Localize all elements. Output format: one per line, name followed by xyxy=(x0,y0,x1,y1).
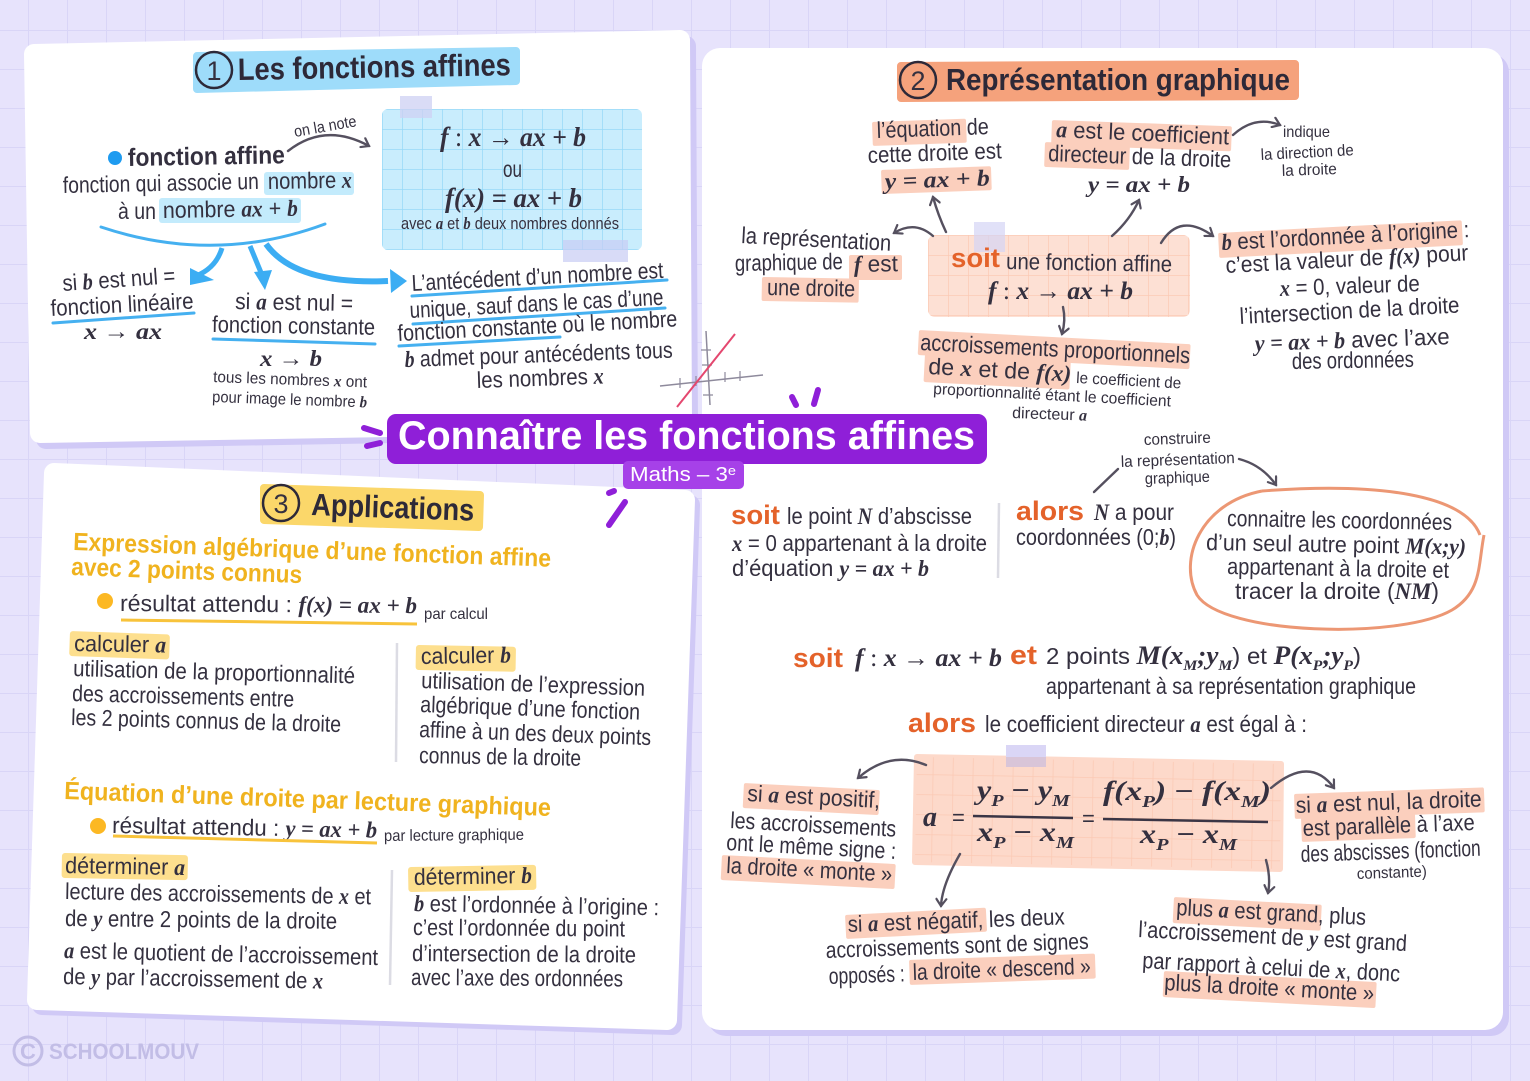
arrow and note: indique la direction: indique xyxy=(1283,124,1330,141)
text: fonction linéaire: x → ax xyxy=(83,319,162,344)
text: soit le point N xyxy=(731,500,987,581)
notation box: f(x) = ax + b xyxy=(445,183,582,213)
box: formule du coefficient directeur: P xyxy=(1141,792,1156,811)
panel: applications xyxy=(37,473,690,1025)
text: soit f et 2 points M et P: M xyxy=(1217,658,1233,674)
text: ordonnée à l'origine: y = ax + b avec l’axe xyxy=(1251,323,1450,356)
text: si a est négatif: la droite « descend » xyxy=(912,953,1091,985)
notation box: ou xyxy=(503,156,522,182)
main title: Connaître les fonctions affines xyxy=(398,414,975,458)
note: construire la représentation graphique: la représentation xyxy=(1121,450,1235,471)
callout: connaître les coordonnées: connaitre les coordonnées xyxy=(1227,505,1452,535)
text: antécédent: unique, sauf dans le cas d’une xyxy=(409,284,664,323)
block: déterminer b: avec l’axe des ordonnées xyxy=(411,964,623,991)
box: formule du coefficient directeur: M xyxy=(1055,833,1075,852)
box: formule du coefficient directeur: x xyxy=(977,817,990,847)
box: soit une fonction affine: f : x → ax + b xyxy=(988,278,1133,305)
watermark: schoolmouv xyxy=(14,1037,199,1065)
text: soit le point N: x = 0 appartenant à la droite xyxy=(731,530,987,556)
text: accroissements proportionnels xyxy=(918,329,1191,425)
result: par lecture graphique: résultat attendu : y = ax + b xyxy=(112,812,377,843)
text: si a est positif xyxy=(721,780,897,889)
block: calculer b: utilisation de l’expression xyxy=(421,667,646,701)
result: par calcul: résultat attendu : f(x) = ax + b xyxy=(120,590,417,618)
heading: applications xyxy=(263,485,480,528)
text: équation de la droite: y = ax + b xyxy=(881,165,990,194)
block: déterminer b: d’intersection de la droite xyxy=(412,940,636,968)
text: antécédent: b admet pour antécédents tous xyxy=(404,337,673,372)
text: alors le coefficient directeur: le coefficient directeur a est égal à : xyxy=(985,711,1307,737)
block: calculer a: utilisation de la proportionnalité xyxy=(73,655,355,688)
text: soit le point N: le point N d’abscisse xyxy=(787,503,972,529)
note: construire la représentation graphique: construire xyxy=(1144,430,1211,449)
callout: connaître les coordonnées xyxy=(1190,488,1484,629)
text: soit f et 2 points M et P: soit xyxy=(793,643,843,673)
block: déterminer a xyxy=(62,852,379,994)
subtitle: Maths 3e: Maths – 3 xyxy=(630,464,718,486)
text: accroissements proportionnels: directeur a xyxy=(1012,405,1087,425)
note: construire la représentation graphique xyxy=(1094,430,1276,492)
arrows from formula box xyxy=(858,760,1334,906)
block: calculer b: connus de la droite xyxy=(419,742,581,771)
text: si a est positif: si a est positif, xyxy=(747,780,881,813)
box: formule du coefficient directeur: − f(x xyxy=(1173,776,1233,806)
box: formule du coefficient directeur: P xyxy=(990,791,1004,810)
text: soit f et 2 points M et P: P xyxy=(1313,658,1323,674)
text: si a est nul xyxy=(1294,786,1485,883)
text: ordonnée à l'origine: b est l’ordonnée à l’origine : xyxy=(1221,216,1470,255)
box: formule du coefficient directeur: = xyxy=(952,805,965,830)
text: soit f et 2 points M et P: ) xyxy=(1232,643,1240,669)
decorative dashes around title xyxy=(364,390,818,525)
arrow and note: indique la direction xyxy=(1233,122,1354,180)
text: antécédent: L’antécédent d’un nombre est xyxy=(411,257,664,296)
box: formule du coefficient directeur: M xyxy=(1051,791,1071,810)
box: formule du coefficient directeur: − xyxy=(1004,775,1038,805)
text: accroissements proportionnels: proportionnalité étant le coefficient xyxy=(933,381,1172,410)
callout: connaître les coordonnées: tracer la droite (NM) xyxy=(1235,578,1439,604)
text: coefficient directeur: a est le coefficient xyxy=(1056,116,1230,150)
arrow: on la note xyxy=(288,113,369,151)
arrow and note: indique la direction: la droite xyxy=(1282,161,1337,180)
text: plus a est grand xyxy=(1138,894,1408,1008)
text: la représentation graphique: f est xyxy=(854,250,899,277)
text: fonction constante: pour image le nombre b xyxy=(212,389,367,411)
definition: fonction affine: fonction affine xyxy=(128,141,285,172)
box: formule du coefficient directeur: − xyxy=(1168,819,1203,849)
block: déterminer a: a est le quotient de l’accroissement xyxy=(64,937,379,970)
text: plus a est grand: par rapport à celui de x, donc xyxy=(1142,947,1401,986)
box: formule du coefficient directeur: a xyxy=(923,802,937,833)
text: antécédent xyxy=(397,257,678,393)
text: soit f et 2 points M et P: ;y xyxy=(1322,641,1344,670)
block: déterminer a: déterminer a xyxy=(65,852,185,880)
definition: fonction affine: fonction qui associe un xyxy=(63,168,259,198)
text: soit f et 2 points M et P: ) xyxy=(1353,643,1361,669)
blue branching arrows xyxy=(101,224,407,293)
text: la représentation graphique: la représentation xyxy=(741,222,892,256)
text: fonction constante xyxy=(212,288,375,411)
text: si a est négatif: opposés : xyxy=(828,960,905,989)
box: formule du coefficient directeur: = xyxy=(1082,806,1095,831)
box: soit une fonction affine: soit xyxy=(951,243,1000,273)
result: par calcul xyxy=(97,590,488,624)
text: si a est négatif: accroissements sont de signes xyxy=(825,928,1089,963)
text: équation de la droite xyxy=(867,113,1003,194)
subtitle: Maths 3e xyxy=(623,461,744,489)
block: déterminer a: de y par l’accroissement de x xyxy=(63,963,323,994)
block: déterminer a: de y entre 2 points de la droite xyxy=(65,905,337,934)
heading: les fonctions affines: 1 xyxy=(206,56,222,86)
text: la représentation graphique: graphique de xyxy=(735,248,843,276)
block: calculer b xyxy=(416,641,652,771)
text: alors N a pour coordonnées: coordonnées (0;b) xyxy=(1016,524,1176,550)
text: soit f et 2 points M et P: M xyxy=(1182,658,1198,674)
box: formule du coefficient directeur: x xyxy=(1140,819,1153,849)
text: si a est positif: les accroissements xyxy=(730,807,897,842)
block: déterminer a: lecture des accroissements de x et xyxy=(65,878,372,909)
text: ordonnée à l'origine xyxy=(1218,216,1470,374)
text: fonction linéaire: fonction linéaire xyxy=(50,288,194,321)
text: fonction linéaire xyxy=(50,262,194,344)
text: soit le point N: soit xyxy=(731,500,780,530)
block: déterminer b: c’est l’ordonnée du point xyxy=(413,914,626,941)
text: soit f et 2 points M et P: appartenant à sa représentation graphique xyxy=(1046,673,1416,699)
box: formule du coefficient directeur: P xyxy=(992,833,1006,852)
block: calculer b: affine à un des deux points xyxy=(419,716,652,750)
block: calculer b: algébrique d’une fonction xyxy=(420,691,641,725)
subtitle: Maths 3e: e xyxy=(728,463,736,478)
notation box xyxy=(382,96,642,262)
text: soit f et 2 points M et P: f : x → ax + b xyxy=(855,645,1002,672)
heading: équation d'une droite: Équation d’une droite par lecture graphique xyxy=(64,776,552,822)
result: par lecture graphique: par lecture graphique xyxy=(384,827,524,845)
text: si a est négatif: si a est négatif, les deux xyxy=(847,903,1065,937)
text: si a est nul: constante) xyxy=(1357,864,1427,883)
result: par calcul: par calcul xyxy=(424,606,488,623)
watermark: schoolmouv: C xyxy=(20,1039,36,1064)
text: alors N a pour coordonnées xyxy=(1016,496,1176,550)
text: coefficient directeur: directeur de la droite xyxy=(1048,140,1232,172)
text: ordonnée à l'origine: x = 0, valeur de xyxy=(1278,270,1420,301)
text: antécédent: fonction constante où le nombre xyxy=(397,305,678,346)
text: la représentation graphique: une droite xyxy=(767,274,855,302)
text: alors N a pour coordonnées: alors xyxy=(1016,496,1084,526)
heading: représentation graphique: Représentation graphique xyxy=(946,62,1290,97)
text: fonction constante: si a est nul = xyxy=(235,288,353,316)
text: si a est nul: si a est nul, la droite xyxy=(1295,786,1482,818)
text: fonction linéaire: si b est nul = xyxy=(62,262,176,296)
text: soit f et 2 points M et P: 2 points M(x xyxy=(1046,641,1181,670)
definition: fonction affine: nombre ax + b xyxy=(163,195,298,223)
box: formule du coefficient directeur: − xyxy=(1005,817,1040,847)
text: accroissements proportionnels: le coefficient de xyxy=(1076,370,1182,392)
text: équation de la droite: l’équation de xyxy=(876,113,989,143)
block: calculer a: des accroissements entre xyxy=(72,680,294,712)
box: formule du coefficient directeur: ) xyxy=(1151,776,1166,806)
definition: fonction affine: nombre x xyxy=(268,167,352,194)
heading: applications: 3 xyxy=(273,489,289,519)
panel: les fonctions affines xyxy=(34,40,688,439)
box: formule du coefficient directeur xyxy=(915,745,1281,869)
block: déterminer b: b est l’ordonnée à l’origine : xyxy=(414,890,659,920)
text: la représentation graphique xyxy=(735,222,902,303)
text: si a est nul: est parallèle à l’axe xyxy=(1302,809,1475,841)
text: plus a est grand: plus a est grand, plus xyxy=(1176,894,1367,930)
text: accroissements proportionnels: de x et de f(x) xyxy=(928,353,1072,386)
notation box: avec a et b deux nombres donnés xyxy=(401,214,619,233)
box: formule du coefficient directeur: y xyxy=(977,775,989,805)
result: par lecture graphique xyxy=(90,812,524,845)
callout: connaître les coordonnées: d’un seul autre point M(x;y) xyxy=(1206,529,1466,560)
notation box: f : x → ax + b xyxy=(440,122,586,152)
box: formule du coefficient directeur: f(x xyxy=(1103,776,1134,806)
block: calculer a: les 2 points connus de la droite xyxy=(71,704,341,737)
box: soit une fonction affine xyxy=(928,222,1190,317)
text: soit f et 2 points M et P: P xyxy=(1343,658,1354,674)
arrow: on la note: on la note xyxy=(293,113,358,141)
heading: applications: Applications xyxy=(311,487,475,528)
note: construire la représentation graphique: graphique xyxy=(1145,469,1210,488)
icon: graph decoration xyxy=(660,331,763,407)
text: alors le coefficient directeur xyxy=(908,708,1307,738)
text: coefficient directeur xyxy=(1044,116,1232,197)
callout: connaître les coordonnées: appartenant à la droite et xyxy=(1227,553,1450,583)
block: déterminer b: déterminer b xyxy=(414,862,532,890)
block: calculer a: calculer a xyxy=(74,630,166,658)
arrows from central box xyxy=(894,197,1213,334)
block: calculer a xyxy=(69,630,355,737)
text: alors N a pour coordonnées: N a pour xyxy=(1093,499,1174,525)
definition: fonction affine xyxy=(63,141,354,224)
text: si a est positif: ont le même signe : xyxy=(726,829,897,864)
text: fonction constante: fonction constante xyxy=(212,311,375,340)
heading: expression algébrique: Expression algébrique d’une fonction affine xyxy=(73,528,552,573)
text: fonction constante: x → b xyxy=(259,346,322,371)
text: soit f et 2 points M et P: et P(x xyxy=(1247,641,1311,670)
text: si a est négatif xyxy=(825,903,1096,989)
box: formule du coefficient directeur: x xyxy=(1040,817,1053,847)
box: formule du coefficient directeur: P xyxy=(1155,835,1169,854)
box: formule du coefficient directeur: ) xyxy=(1256,776,1271,806)
text: ordonnée à l'origine: c’est la valeur de f(x) pour xyxy=(1225,239,1469,278)
box: formule du coefficient directeur: M xyxy=(1218,835,1238,854)
text: coefficient directeur: y = ax + b xyxy=(1085,172,1190,197)
text: si a est positif: la droite « monte » xyxy=(726,852,893,887)
heading: expression algébrique: avec 2 points connus xyxy=(71,553,303,589)
text: équation de la droite: cette droite est xyxy=(867,137,1003,168)
box: formule du coefficient directeur: y xyxy=(1038,775,1050,805)
heading: les fonctions affines: Les fonctions affines xyxy=(238,47,511,87)
text: accroissements proportionnels: accroissements proportionnels xyxy=(920,329,1191,368)
text: fonction constante: tous les nombres x ont xyxy=(213,369,368,391)
block: calculer b: calculer b xyxy=(421,641,511,669)
watermark: schoolmouv: SCHOOLMOUV xyxy=(49,1039,199,1064)
arrow and note: indique la direction: la direction de xyxy=(1260,142,1354,164)
box: formule du coefficient directeur: M xyxy=(1240,792,1261,811)
text: alors le coefficient directeur: alors xyxy=(908,708,976,738)
text: soit f et 2 points M et P xyxy=(793,640,1416,699)
box: soit une fonction affine: une fonction affine xyxy=(1006,248,1172,277)
definition: fonction affine: à un xyxy=(118,198,156,224)
box: formule du coefficient directeur: x xyxy=(1203,819,1216,849)
text: ordonnée à l'origine: des ordonnées xyxy=(1292,346,1414,374)
text: plus a est grand: l’accroissement de y est grand xyxy=(1138,916,1408,956)
text: plus a est grand: plus la droite « monte » xyxy=(1164,969,1375,1006)
text: antécédent: les nombres x xyxy=(476,363,604,393)
text: soit f et 2 points M et P: et xyxy=(1010,640,1037,670)
text: soit f et 2 points M et P: ;y xyxy=(1197,641,1219,670)
panel: représentation graphique xyxy=(702,48,1509,1036)
block: déterminer b xyxy=(408,862,659,991)
heading: représentation graphique: 2 xyxy=(910,66,926,96)
text: ordonnée à l'origine: l’intersection de la droite xyxy=(1239,292,1460,329)
text: soit le point N: d’équation y = ax + b xyxy=(732,555,929,581)
